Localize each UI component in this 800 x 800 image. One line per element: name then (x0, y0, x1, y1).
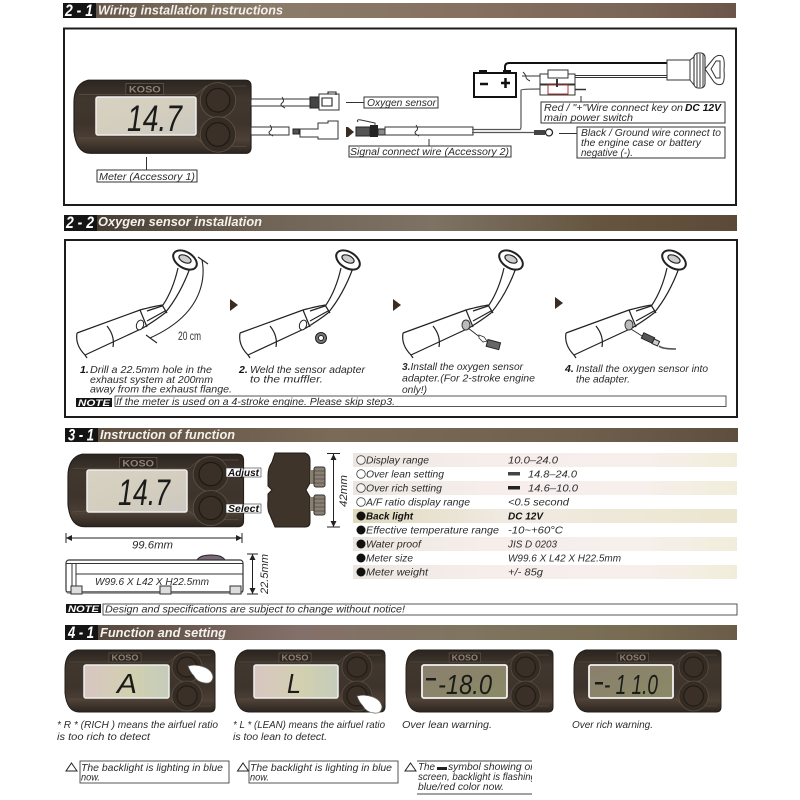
icon: key main power switch (667, 53, 724, 88)
header: 3-1 instruction of function: 3 - 1 (68, 426, 94, 444)
row: meter weight: +/- 85g (508, 566, 543, 578)
label: black ground wire (559, 127, 725, 159)
meter: over rich warning (574, 650, 721, 712)
row: meter size: W99.6 X L42 X H22.5mm (508, 552, 621, 564)
label: select: Select (228, 503, 260, 515)
meter bottom view: W99.6 X L42 X H22.5mm (95, 576, 209, 588)
step 4 text: 4. (564, 363, 574, 375)
row: effective temperature range: -10~+60°C (508, 524, 563, 536)
wires and connector: signal wire (356, 120, 473, 137)
wire: battery positive to switch (505, 63, 668, 70)
warning 2: backlight blue (238, 761, 398, 784)
meter: over rich warning: - 1 1.0 (604, 669, 658, 700)
specification table (353, 453, 737, 579)
caption: over lean warning: Over lean warning. (402, 719, 492, 731)
step 4 text (564, 363, 708, 386)
row: over rich setting (357, 482, 578, 494)
caption: rich (57, 719, 218, 743)
warning 3: flashing backlight: blue/red color now. (418, 781, 504, 793)
meter: rich display with finger on adjust: A (115, 668, 137, 699)
warning 3: flashing backlight: symbol showing on (448, 761, 536, 773)
panel: wiring diagram (64, 28, 736, 205)
label: red wire: main power switch (544, 112, 633, 124)
label: oxygen sensor: Oxygen sensor (367, 97, 436, 109)
meter: lean display with finger on select: L (287, 668, 301, 699)
row: meter size (356, 552, 621, 564)
step 3 text: 3.Install the oxygen sensor (402, 361, 523, 373)
label: signal connect wire: Signal connect wire (Accessory 2) (350, 146, 509, 158)
row: back light: DC 12V (508, 510, 544, 522)
dimension: 22.5mm (247, 554, 271, 595)
header: 3-1 instruction of function (65, 426, 738, 444)
dimension: 99.6mm (66, 533, 242, 552)
warning 1: backlight blue: The backlight is lighting in blue (81, 762, 223, 774)
icon: battery (474, 70, 516, 97)
header: 2-1 wiring installation instructions (63, 1, 736, 20)
warning 1: backlight blue: now. (81, 772, 100, 784)
wire: fuse holder to switch (522, 72, 668, 90)
caption: lean: * L * (LEAN) means the airfuel ratio (233, 719, 385, 731)
step 3 text: only!) (402, 384, 427, 396)
meter: lean display with finger on select (235, 650, 385, 713)
row: meter weight: Meter weight (366, 566, 429, 578)
step 1 text: Drill a 22.5mm hole in the (90, 364, 212, 376)
warning 3: flashing backlight: The (418, 761, 435, 773)
label: red wire: Red / "+"Wire connect key on (544, 102, 683, 114)
caption: rich: is too rich to detect (57, 731, 151, 743)
row: display range: 10.0–24.0 (508, 454, 558, 466)
step 1 text: away from the exhaust flange. (90, 384, 232, 396)
note: design and specifications: NOTE (68, 604, 100, 615)
icon: finger press (357, 695, 382, 713)
step 3 text: adapter.(For 2-stroke engine (402, 372, 535, 384)
wires and connector: meter signal (251, 121, 338, 139)
caption: rich: * R * (RICH ) means the airfuel ratio (57, 719, 218, 731)
row: back light: Back light (366, 510, 413, 522)
row: effective temperature range: Effective temperature range (366, 524, 499, 536)
header: 3-1 instruction of function: Instruction of function (100, 427, 235, 442)
warning 1: backlight blue (66, 761, 229, 784)
arrow: step 3 to 4 (555, 297, 563, 309)
icon: ring terminal (534, 129, 552, 136)
arrow: connect (346, 127, 354, 137)
label: signal connect wire (349, 139, 511, 158)
row: A/F ratio display range: A/F ratio display range (365, 496, 470, 508)
dimension: 42mm (327, 454, 350, 527)
label: red wire: DC 12V (685, 102, 722, 114)
icon: finger press (188, 665, 213, 683)
step 4 text: Install the oxygen sensor into (576, 363, 708, 375)
label: meter accessory 1: Meter (Accessory 1) (99, 171, 195, 183)
row: effective temperature range (356, 524, 563, 536)
meter front view with dimensions (68, 454, 261, 527)
label: black ground wire: Black / Ground wire connect to (581, 127, 721, 139)
label: meter accessory 1 (97, 157, 197, 183)
note: skip step 3: If the meter is used on a 4-stroke engine. Please skip step3. (116, 396, 395, 408)
row: water proof: Water proof (366, 538, 422, 550)
row: A/F ratio display range (357, 496, 570, 508)
step 2 text: Weld the sensor adapter (250, 364, 365, 376)
meter: rich display with finger on adjust (65, 650, 215, 712)
arrow: step 2 to 3 (393, 299, 401, 311)
row: display range: Display range (366, 454, 429, 466)
warning 3: flashing backlight: screen, backlight is flashing (418, 771, 536, 783)
meter bottom view (66, 555, 243, 594)
header: 4-1 function and setting (65, 623, 737, 642)
caption: over rich warning: Over rich warning. (572, 719, 653, 731)
row: meter size: Meter size (366, 552, 413, 564)
header: 2-1 wiring installation instructions: Wiring installation instructions (98, 2, 283, 18)
step 4 text: the adapter. (576, 374, 630, 386)
header: 2-2 oxygen sensor installation: 2 - 2 (65, 213, 94, 232)
meter: over lean warning (406, 650, 553, 712)
step 3 illustration: exhaust with adapter parts (403, 246, 526, 358)
step 1 text: 1. (80, 364, 89, 376)
row: over lean setting: 14.8–24.0 (528, 468, 577, 480)
meter accessory 1 (74, 80, 251, 153)
row: over rich setting: Over rich setting (366, 482, 442, 494)
wire: ground and power to signal wire (472, 89, 540, 132)
row: A/F ratio display range: <0.5 second (508, 496, 570, 508)
dimension: 99.6mm: 99.6mm (132, 540, 173, 552)
label: black ground wire: the engine case or battery (581, 137, 702, 149)
warning 2: backlight blue: The backlight is lighting in blue (250, 762, 392, 774)
row: meter weight (356, 566, 543, 578)
arrow: step 1 to 2 (230, 299, 238, 311)
wires and connector: oxygen sensor (251, 92, 339, 110)
step 2 text: 2. (238, 364, 248, 376)
label: adjust: Adjust (227, 467, 259, 479)
row: display range (357, 454, 558, 466)
step 3 text (402, 361, 535, 396)
header: 2-2 oxygen sensor installation: Oxygen sensor installation (98, 214, 262, 229)
header: 4-1 function and setting: Function and setting (100, 625, 226, 640)
row: back light (356, 510, 544, 522)
meter front view with dimensions: 14.7 (118, 472, 171, 513)
step 2 illustration: exhaust with adapter (240, 246, 363, 358)
dimension: 22.5mm: 22.5mm (259, 554, 271, 595)
caption: lean: is too lean to detect. (233, 731, 327, 743)
label: black ground wire: negative (-). (581, 147, 633, 159)
dimension: 42mm: 42mm (338, 475, 350, 507)
meter accessory 1: 14.7 (127, 98, 183, 139)
warning 2: backlight blue: now. (250, 772, 269, 784)
step 1 illustration: exhaust with 20 cm dimension (77, 246, 208, 358)
note: design and specifications: Design and specifications are subject to change without notice! (105, 604, 405, 616)
meter side view (268, 453, 325, 527)
step 1 text (80, 364, 232, 396)
header: 2-2 oxygen sensor installation (64, 213, 737, 232)
note: skip step 3 (76, 396, 726, 409)
warning 3: flashing backlight (405, 761, 536, 794)
step 4 illustration: exhaust with oxygen sensor (566, 246, 689, 358)
row: over rich setting: 14.6–10.0 (528, 482, 578, 494)
header: 4-1 function and setting: 4 - 1 (67, 623, 94, 642)
row: over lean setting: Over lean setting (366, 468, 444, 480)
header: 2-1 wiring installation instructions: 2 - 1 (64, 1, 93, 20)
caption: lean (233, 719, 385, 743)
label: red wire (541, 96, 725, 124)
row: over lean setting (357, 468, 577, 480)
panel: oxygen sensor installation steps (65, 240, 737, 417)
step 2 text: to the muffler. (250, 374, 323, 386)
step 2 text (238, 364, 365, 386)
note: skip step 3: NOTE (78, 398, 111, 409)
step 1 illustration: exhaust with 20 cm dimension: 20 cm (178, 329, 201, 343)
step 1 text: exhaust system at 200mm (90, 374, 213, 386)
row: water proof: JIS D 0203 (507, 538, 557, 550)
icon: fuse holder (540, 70, 575, 95)
meter: over lean warning: -18.0 (438, 669, 492, 700)
note: design and specifications (66, 604, 737, 616)
row: water proof (356, 538, 557, 550)
